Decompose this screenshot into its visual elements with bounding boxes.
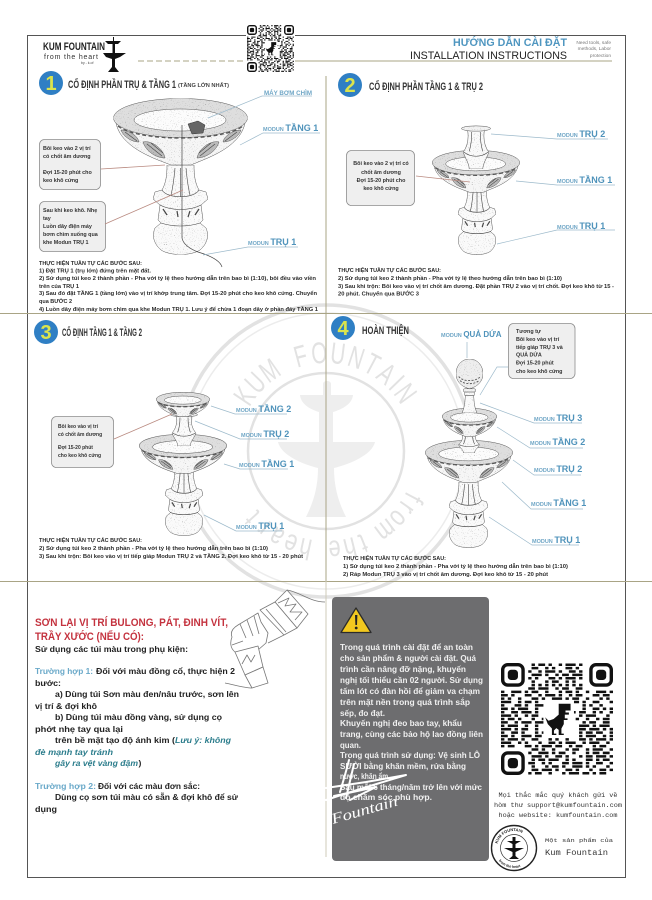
title [410,36,567,62]
heading 3: CỐ ĐỊNH TẦNG 1 & TẦNG 2 [62,325,142,339]
case 1: đè mạnh tay tránh [35,747,113,757]
heading 1: CỐ ĐỊNH PHẦN TRỤ & TẦNG 1 [68,77,176,91]
step badge 4 [331,316,355,340]
instructions 2: 2) Sử dụng túi keo 2 thành phần - Pha với tỷ lệ theo hướng dẫn trên bao bì (1:10) [338,275,562,282]
logo stamp: Kum Fountain [490,824,538,872]
contact text [494,790,622,819]
icon: hand holding paint brush [225,590,325,688]
case 1: trên bề mặt tạo độ ánh kim ( [55,735,175,745]
panel 1: fix pedestal and tier 1 [39,71,320,313]
callout: glue: chốt âm dương [361,169,401,176]
callout: glue points [40,140,100,190]
case 1: Đối với màu đồng cổ, thực hiện 2 [96,666,235,676]
logo stamp: Kum Fountain: from the heart [498,860,521,868]
label: module pillar 1: MODUN TRỤ 1 [557,221,605,231]
callout: glue pineapple: Đợi 15-20 phút [516,360,554,366]
case 1: a) Dùng túi Sơn màu đen/nâu trước, sơn lên [55,689,239,699]
warning text: sếp, đo đạt. [340,709,385,718]
label: module pillar 2: MODUN TRỤ 2 [241,429,289,439]
watermark: Kum Fountain round stamp: o [383,503,414,534]
instructions 3: 2) Sử dụng túi keo 2 thành phần - Pha với tỷ lệ theo hướng dẫn trên bao bì (1:10) [39,545,268,552]
watermark: Kum Fountain round stamp: O [310,337,328,371]
case 1: ) [138,758,142,768]
warning text: cho sản phẩm & người cài đặt. Quá [340,653,476,663]
warning text: tấm lót có đàn hồi để giảm va chạm [340,686,480,696]
callout: glue points: có chốt âm dương [43,153,91,160]
callout: glue points: keo khô cứng [43,178,78,184]
watermark: Kum Fountain round stamp: a [263,520,290,554]
callout: glue points: Đợi 15-20 phút cho [43,170,92,176]
contact text: Mọi thắc mắc quý khách gửi về [498,790,618,799]
watermark: Kum Fountain round stamp: K [228,382,263,411]
warning text: Trong quá trình cài đặt để an toàn [340,642,473,652]
watermark: Kum Fountain round stamp: U [329,337,347,372]
label: module pillar 2: MODUN TRỤ 2 [557,129,605,139]
repaint heading [35,616,228,643]
brand credit: Kum Fountain [545,848,608,858]
callout: glue pineapple: tiếp giáp TRỤ 3 và [516,344,564,351]
watermark: Kum Fountain round stamp: f [398,487,429,508]
callout: glue pineapple: cho keo khô cứng [516,369,562,375]
watermark: Kum Fountain round stamp: r [392,496,422,520]
callout: glue pineapple [508,324,575,378]
instructions 1: 3) Sau đó đặt TẦNG 1 (tầng lớn) vào vị trí khớp trung tâm. Đợi 15-20 phút cho keo khô cứng. Chuyển [39,290,318,297]
instructions 1: qua BƯỚC 2 [39,297,72,305]
label: module tier 2: MODUN TẦNG 2 [236,404,291,414]
watermark: Kum Fountain round stamp: A [370,357,402,392]
header logo: Kum Fountain: by - k.of [81,61,93,65]
callout: thread cable: tay [43,216,51,222]
watermark: Kum Fountain round stamp: M [254,353,287,390]
contact text: hoặc website: kumfountain.com [498,812,618,819]
watermark: Kum Fountain round stamp: m [369,512,402,548]
case 2: Dùng cọ sơn túi màu có sẵn & đợi khô để sử [55,791,239,802]
callout: glue points: Bôi keo vào 2 vị trí [43,146,91,152]
label: module pineapple: MODUN QUẢ DỨA [441,330,502,339]
watermark: Kum Fountain round stamp: I [382,370,410,397]
heading 1 note: (TẦNG LỚN NHẤT) [178,81,229,89]
label: submersible pump: MÁY BƠM CHÌM [264,89,312,97]
case 1: gây ra vệt vàng đậm [54,758,138,768]
warning text: Khuyến nghị đeo bao tay, khẩu [340,718,462,728]
repaint section [35,616,239,814]
instructions 2: 20 phút. Chuyển qua BƯỚC 3 [338,290,419,298]
callout: thread cable [40,202,106,252]
large QR code [501,663,613,775]
warning text: Trong quá trình sử dụng: Vệ sinh LÔ [340,749,481,760]
warning text [340,642,483,802]
warning text: SƯỞI bằng khăn mềm, rửa bằng [340,760,466,771]
brand credit [545,837,614,858]
signature: Fountain [326,760,406,828]
header logo: Kum Fountain: from the heart [44,54,98,61]
fountain drawing 4 [425,359,513,548]
repaint heading: TRẦY XƯỚC (NẾU CÓ): [35,630,144,643]
instructions 4: 2) Ráp Modun TRỤ 3 vào vị trí chốt âm dương. Đợi keo khô từ 15 - 20 phút [343,571,548,578]
warning text: Sau mỗi 6 tháng/năm trở lên với mức [340,782,482,792]
instructions 3 [39,536,303,560]
watermark: Kum Fountain round stamp: r [251,513,276,543]
label: module pillar 3: MODUN TRỤ 3 [534,413,582,423]
warning text: nước, khăn ẩm. [340,771,390,781]
label: module pillar 1: MODUN TRỤ 1 [236,521,284,531]
label: module pillar 1: MODUN TRỤ 1 [248,237,296,247]
leader lines 1 [101,96,320,255]
label: module tier 1: MODUN TẦNG 1 [557,175,612,185]
title: INSTALLATION INSTRUCTIONS [410,50,567,62]
panel 4: finishing [331,316,586,578]
signature: Fountain: Fountain [329,794,399,828]
instructions 2: 3) Sau khi trộn: Bôi keo vào vị trí chốt âm dương. Đặt phần TRỤ 2 vào vị trí chốt. Đợi keo khô từ 15 - [338,283,614,290]
callout: glue: Đợi 15-20 phút cho [357,178,406,184]
watermark: Kum Fountain round stamp: F [291,340,311,374]
leader lines 2 [416,134,615,244]
label: module pillar 2: MODUN TRỤ 2 [534,464,582,474]
watermark: Kum Fountain round stamp: U [239,367,273,400]
heading 2: CỐ ĐỊNH PHẦN TẦNG 1 & TRỤ 2 [369,79,483,93]
callout: glue: Bôi keo vào 2 vị trí có [353,161,409,167]
watermark: Kum Fountain round stamp: e [327,533,342,566]
watermark: Kum Fountain round stamp [180,305,472,597]
note: tools and safety [576,40,611,59]
instructions 1: 1) Đặt TRỤ 1 (trụ lớn) đứng trên mặt đất. [39,268,151,274]
repaint intro: Sử dụng các túi màu trong phụ kiện: [35,644,188,654]
callout: glue pineapple: Bôi keo vào vị trí [516,337,560,343]
callout: thread cable: Luồn dây điện máy [43,224,92,230]
warning text: trình cần nâng đỡ nặng, khuyến [340,665,466,674]
instructions 1: 4) Luồn dây điện máy bơm chìm qua khe Modun TRỤ 1. Lưu ý để chừa 1 đoạn dây ở phần đáy TẦNG 1 [39,306,318,313]
callout: glue: Bôi keo vào vị trí [58,424,99,430]
title: HƯỚNG DẪN CÀI ĐẶT [453,36,567,49]
case 1: Trường hợp 1: [35,666,93,676]
instructions 4: 1) Sử dụng túi keo 2 thành phần - Pha với tỷ lệ theo hướng dẫn trên bao bì (1:10) [343,563,568,570]
watermark: Kum Fountain round stamp: N [344,341,368,376]
panel: safety warning [332,597,489,861]
warning text: nghị tối thiểu cần 02 người. Sử dụng [340,675,483,685]
fountain drawing 3 [139,392,227,536]
watermark: Kum Fountain round stamp: h [296,531,315,565]
warning text: trang, cùng các bảo hộ lao đồng liên [340,730,483,739]
callout: glue pineapple: Tương tự [516,329,541,335]
warning text: trên mặt nền trong quá trình sắp [340,696,470,707]
callout: glue: có chốt âm dương [58,431,102,438]
fountain drawing 1 [114,98,248,267]
case 1: bước: [35,678,61,688]
instructions 4 [343,554,568,578]
step badge 1: 1 [45,73,57,95]
label: module tier 1: MODUN TẦNG 1 [531,498,586,508]
logo stamp: Kum Fountain: KUM FOUNTAIN [495,828,523,844]
instructions 1: 2) Sử dụng túi keo 2 thành phần - Pha với tỷ lệ theo hướng dẫn trên bao bì (1:10), bôi đều vào viền [39,275,317,282]
note: tools and safety: Need tools, safe [576,40,611,46]
callout: glue: Đợi 15-20 phút [58,445,93,451]
warning text: độ chăm sóc phù hợp. [340,793,432,802]
watermark: Kum Fountain round stamp: h [340,530,360,564]
case 2: Đối với các màu đơn sắc: [98,780,200,791]
instructions 1: trên của TRỤ 1 [39,284,79,290]
case 1 [35,666,239,768]
leader lines 4 [467,342,583,545]
instructions 2: THỰC HIỆN TUẦN TỰ CÁC BƯỚC SAU: [338,266,441,274]
step badge 3 [34,320,58,344]
header QR code [246,24,295,72]
header logo: Kum Fountain [43,37,126,72]
callout: thread cable: Sau khi keo khô. Nhẹ [43,208,97,214]
case 1: phớt nhẹ tay qua lại [35,724,123,734]
callout: glue: cho keo khô cứng [58,453,101,459]
label: module tier 1: MODUN TẦNG 1 [239,459,294,469]
instructions 2 [338,266,614,298]
case 2 [35,780,239,814]
step badge 4: 4 [337,318,349,340]
watermark: Kum Fountain round stamp: e [279,527,302,560]
callout: glue [52,416,114,468]
case 2: dụng [35,804,57,814]
panel 3: fix tier 1 and tier 2 [34,320,303,560]
note: tools and safety: methods, Labor [578,46,611,52]
repaint heading: SƠN LẠI VỊ TRÍ BULONG, PÁT, ĐINH VÍT, [35,616,228,629]
callout: glue pineapple: QUẢ DỨA [516,352,542,358]
case 1: b) Dùng túi màu đồng vàng, sử dụng cọ [55,712,222,722]
case 1: Lưu ý: không [175,735,232,745]
watermark: Kum Fountain round stamp: t [354,527,372,559]
callout: glue [346,150,414,206]
watermark: Kum Fountain round stamp: T [359,348,385,383]
fountain drawing 2 [432,126,520,255]
instructions 3: 3) Sau khi trộn: Bôi keo vào vị trí tiếp giáp Modun TRỤ 2 và TẦNG 2. Đợi keo khô từ 15 - 20 phút [39,553,303,560]
step badge 1 [39,71,63,95]
icon: warning triangle [341,608,371,632]
label: module pillar 1: MODUN TRỤ 1 [532,535,580,545]
contact text: hòm thư support@kumfountain.com [494,802,622,809]
panel 2: fix tier 1 and pillar 2 [338,73,615,298]
warning text: quan. [340,741,361,750]
step badge 3: 3 [40,322,52,344]
label: module tier 1: MODUN TẦNG 1 [263,123,318,133]
leader lines 3 [114,406,288,531]
heading 4: HOÀN THIỆN [362,324,409,337]
case 1: vị trí & đợi khô [35,701,97,711]
instructions 4: THỰC HIỆN TUẦN TỰ CÁC BƯỚC SAU: [343,554,446,562]
watermark: Kum Fountain round stamp: t [239,504,266,530]
instructions 3: THỰC HIỆN TUẦN TỰ CÁC BƯỚC SAU: [39,536,142,544]
step badge 2: 2 [344,75,356,97]
watermark: Kum Fountain round stamp: N [387,378,422,409]
header logo: Kum Fountain: KUM FOUNTAIN [43,41,105,53]
callout: glue: keo khô cứng [363,186,399,192]
label: module tier 2: MODUN TẦNG 2 [530,437,585,447]
note: tools and safety: protection [590,53,611,59]
callout: thread cable: khe Modun TRỤ 1 [43,240,89,246]
step badge 2 [338,73,362,97]
instructions 1 [39,259,318,313]
brand credit: Một sản phẩm của [545,837,614,844]
instructions 1: THỰC HIỆN TUẦN TỰ CÁC BƯỚC SAU: [39,259,142,267]
case 2: Trường hợp 2: [35,781,96,791]
callout: thread cable: bơm chìm xuống qua [43,231,99,238]
